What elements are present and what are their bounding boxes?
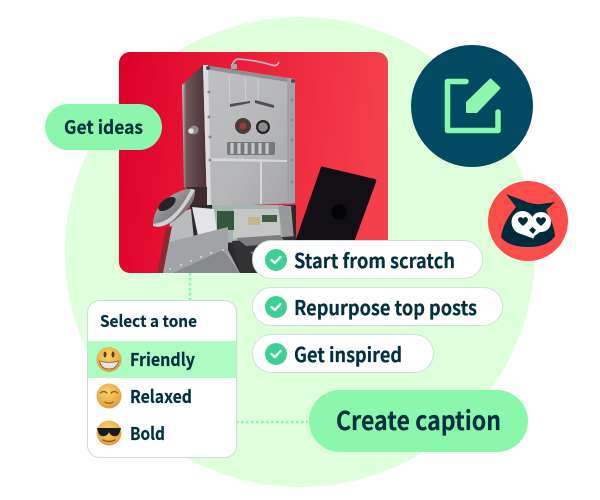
label: relaxed: Relaxed	[130, 384, 192, 409]
button: create caption: Create caption	[336, 401, 501, 438]
icon: sunglasses emoji	[96, 420, 122, 446]
option pill: get inspired: Get inspired	[294, 339, 402, 368]
icon: relaxed emoji	[96, 384, 122, 408]
icon: edit on navy circle	[411, 45, 533, 167]
icon: owl logo on red circle	[488, 181, 568, 261]
pill: get ideas	[45, 104, 162, 150]
circuit board	[212, 205, 283, 243]
option pill: get inspired	[252, 334, 434, 372]
dark body clutter	[187, 187, 207, 207]
option pill: start from scratch	[252, 240, 482, 278]
background circle	[65, 17, 535, 487]
option pill: repurpose top posts	[252, 288, 502, 326]
robot box	[182, 65, 206, 190]
panel: select a tone	[88, 300, 236, 458]
icon: grinning emoji	[96, 347, 122, 372]
heading: select a tone: Select a tone	[100, 308, 197, 332]
option pill: start from scratch: Start from scratch	[294, 245, 455, 274]
robot handle	[232, 59, 279, 67]
laptop	[294, 166, 376, 245]
connector dotted lines	[190, 273, 308, 422]
option pill: repurpose top posts: Repurpose top posts	[294, 292, 477, 321]
label: friendly: Friendly	[130, 347, 195, 372]
photo: robot with laptop on red background	[119, 52, 388, 273]
metal plate	[157, 227, 240, 273]
highlighted row	[88, 341, 236, 378]
helmet dome and arm	[169, 209, 194, 242]
button: create caption	[309, 390, 528, 452]
label: bold: Bold	[130, 421, 165, 446]
pill: get ideas: Get ideas	[64, 113, 143, 140]
